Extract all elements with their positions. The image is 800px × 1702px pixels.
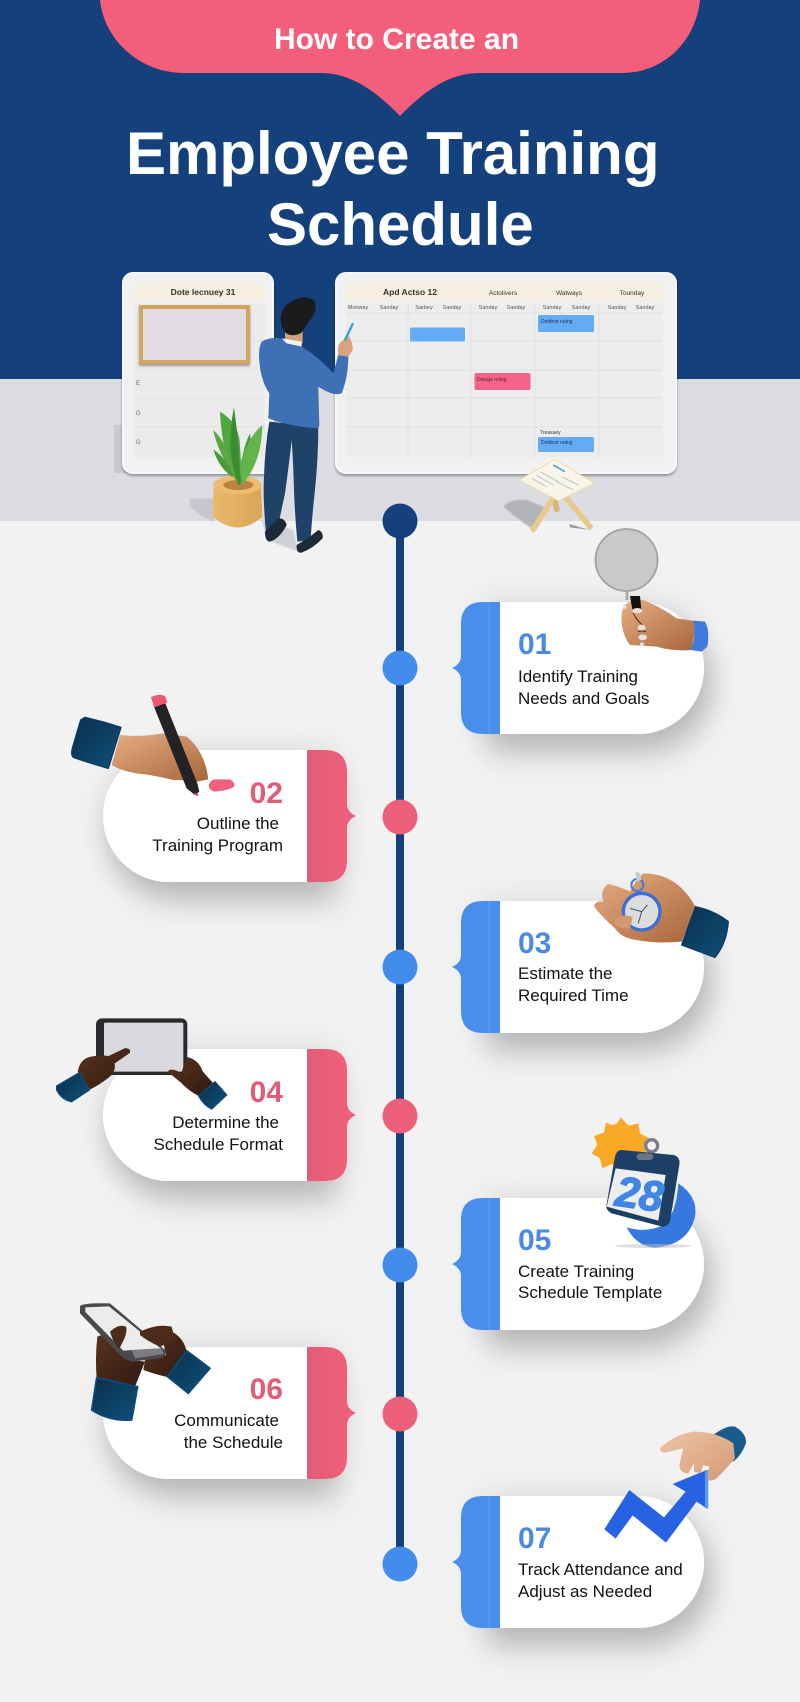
illustration: right schedule board: Deloge reiing xyxy=(477,377,507,383)
card 04 xyxy=(103,1049,356,1181)
illustration: right schedule board: Monway xyxy=(348,305,368,311)
title: Employee Training Schedule xyxy=(126,120,659,258)
illustration: right schedule board: Sanday xyxy=(507,305,526,311)
illustration: right schedule board: Sanday xyxy=(572,305,591,311)
card 04: Determine the xyxy=(172,1113,279,1132)
floor background xyxy=(0,521,800,1702)
illustration: right schedule board: Dotdoor raiing xyxy=(541,319,573,325)
illustration: right schedule board: Sanday xyxy=(479,305,498,311)
icon: hands with smartphone xyxy=(80,1303,210,1420)
card 03 xyxy=(452,901,704,1033)
illustration: left schedule board: Dote lecnuey 31 xyxy=(171,287,236,297)
card 03: 03 xyxy=(518,927,551,960)
card 06: 06 xyxy=(250,1373,283,1406)
card 02: Training Program xyxy=(152,836,283,855)
icon: sun, moon and calendar: 28 xyxy=(612,1168,667,1222)
illustration: right schedule board: Tounday xyxy=(620,290,645,297)
illustration: right schedule board: Sarbey xyxy=(415,305,433,311)
icon: hand with pocket watch xyxy=(594,872,728,957)
title: Employee Training Schedule: Schedule xyxy=(267,191,534,258)
card 04: Schedule Format xyxy=(154,1135,283,1154)
card 02 xyxy=(103,750,356,882)
card 01: Identify Training xyxy=(518,667,638,686)
card 06: Communicate xyxy=(174,1411,279,1430)
card 02: 02 xyxy=(250,777,283,810)
illustration: right schedule board: Sanday xyxy=(636,305,655,311)
wall band xyxy=(0,379,800,521)
card 05: Schedule Template xyxy=(518,1283,662,1302)
card 06 xyxy=(103,1347,356,1479)
header background xyxy=(0,0,800,379)
illustration: right schedule board: Sanday xyxy=(543,305,562,311)
illustration: potted plant xyxy=(190,407,262,527)
illustration: right schedule board: Treasuey xyxy=(540,430,561,436)
pink speech banner xyxy=(100,0,700,116)
card 03: Required Time xyxy=(518,986,629,1005)
card 01: Needs and Goals xyxy=(518,689,649,708)
card 04: 04 xyxy=(250,1076,283,1109)
icon: hands with tablet xyxy=(57,1018,227,1109)
illustration: left schedule board: G xyxy=(136,411,141,417)
illustration: left schedule board: E xyxy=(136,381,140,387)
title: Employee Training Schedule: Employee Training xyxy=(126,120,659,187)
illustration: right schedule board: Apd Actso 12 xyxy=(383,287,437,297)
card 03: Estimate the xyxy=(518,964,612,983)
card 02: Outline the xyxy=(197,814,279,833)
icon: sun, moon and calendar xyxy=(592,1117,695,1248)
icon: hand with rising arrow xyxy=(604,1426,746,1543)
icon: hand with magnifying glass xyxy=(596,529,708,652)
illustration: right schedule board: Dotdoor raiing xyxy=(541,440,573,446)
illustration: left schedule board xyxy=(114,273,273,473)
title line: How to Create an: How to Create an xyxy=(274,23,519,56)
card 05: 05 xyxy=(518,1224,551,1257)
card 07 xyxy=(452,1496,704,1628)
illustration: open book on stand xyxy=(503,459,594,530)
illustration: right schedule board: Actolivers xyxy=(489,290,518,297)
illustration: right schedule board xyxy=(336,273,676,473)
illustration: right schedule board: Sanday xyxy=(608,305,627,311)
card 07: Track Attendance and xyxy=(518,1560,683,1579)
card 05 xyxy=(452,1198,704,1330)
step cards xyxy=(103,602,704,1628)
card 07: Adjust as Needed xyxy=(518,1582,652,1601)
card 07: 07 xyxy=(518,1522,551,1555)
illustration: right schedule board: Watways xyxy=(556,290,583,297)
card 01 xyxy=(452,602,704,734)
card 05: Create Training xyxy=(518,1262,634,1281)
illustration: right schedule board: Sanday xyxy=(443,305,462,311)
icon: hand with marker xyxy=(72,695,234,796)
illustration: left schedule board: G xyxy=(136,440,141,446)
timeline xyxy=(382,504,418,1582)
illustration: right schedule board: Sanday xyxy=(380,305,399,311)
card 06: the Schedule xyxy=(184,1433,283,1452)
card 01: 01 xyxy=(518,628,551,661)
illustration: man pointing at the board xyxy=(259,297,353,553)
